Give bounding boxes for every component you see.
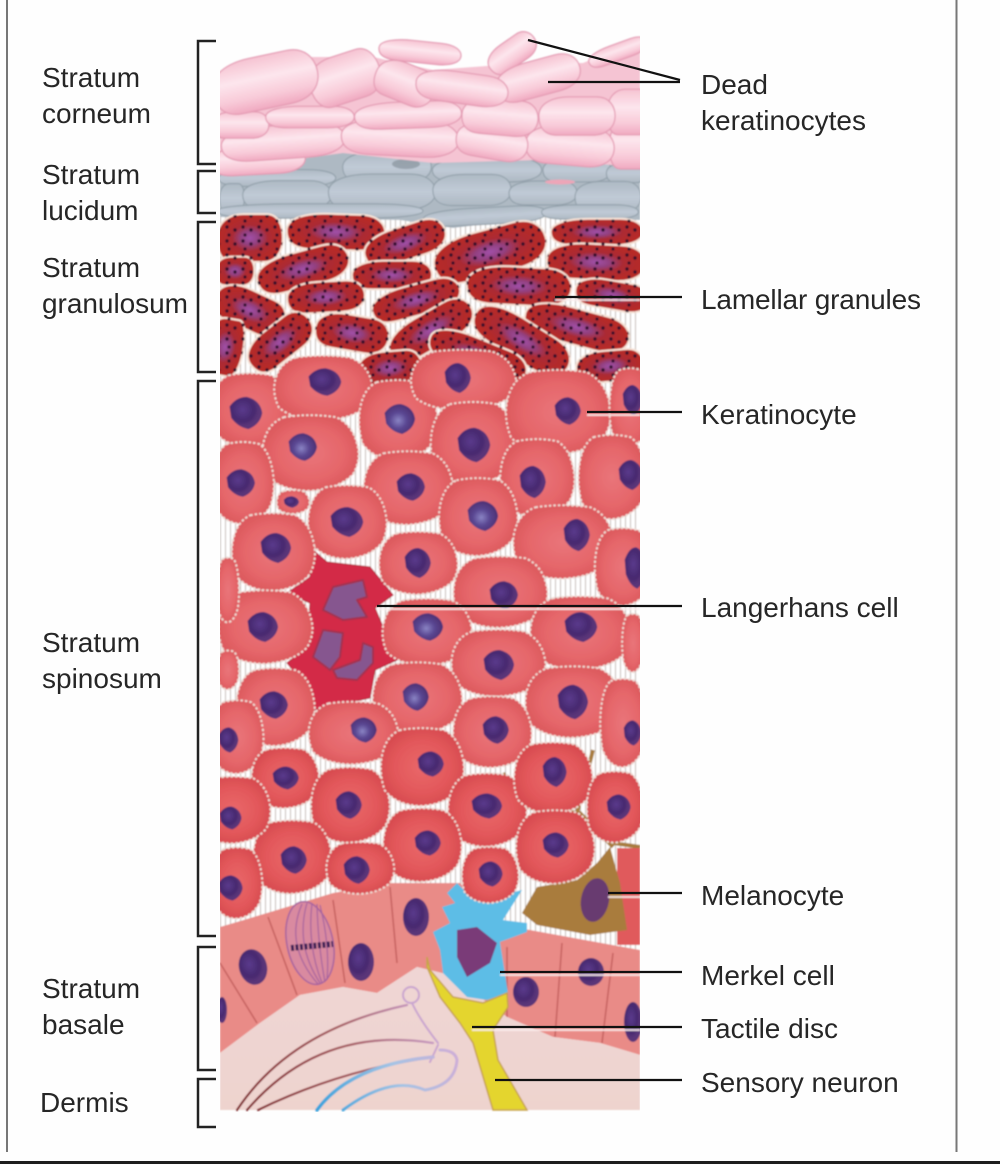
leader: Merkel cell xyxy=(500,971,682,973)
panel: stratum granulosum background xyxy=(220,216,636,370)
bottom frame line xyxy=(0,1161,1000,1164)
dermis nerve fibres and vessels xyxy=(237,987,457,1110)
bracket: stratum spinosum xyxy=(198,381,216,936)
leader: Langerhans cell xyxy=(377,605,682,607)
label: dead keratinocytes: Dead xyxy=(701,69,768,100)
Langerhans cell xyxy=(287,550,397,710)
lamellar granule dots xyxy=(220,215,640,390)
leader: tactile disc xyxy=(472,1026,682,1028)
leader: dead keratinocytes xyxy=(528,40,680,82)
pale ghost lines under the leader lines xyxy=(377,300,640,1030)
label: keratinocyte: Keratinocyte xyxy=(701,399,857,430)
label: stratum granulosum: Stratum xyxy=(42,252,140,283)
panel: stratum lucidum xyxy=(217,150,648,228)
label: stratum lucidum: lucidum xyxy=(42,195,138,226)
panel: stratum basale xyxy=(217,883,642,1055)
Merkel cell xyxy=(433,883,527,1000)
label: Merkel cell: Merkel cell xyxy=(701,960,835,991)
label: stratum basale: Stratum xyxy=(42,973,140,1004)
panel: dermis xyxy=(220,967,640,1110)
label: Langerhans cell: Langerhans cell xyxy=(701,592,899,623)
label: stratum corneum: corneum xyxy=(42,98,151,129)
tactile disc and sensory neuron xyxy=(427,957,527,1110)
leader: melanocyte xyxy=(608,892,682,894)
label: dermis: Dermis xyxy=(40,1087,129,1118)
label: tactile disc: Tactile disc xyxy=(701,1013,838,1044)
label: sensory neuron: Sensory neuron xyxy=(701,1067,899,1098)
panel: stratum corneum dead keratinocytes xyxy=(207,27,655,177)
right frame line xyxy=(956,0,958,1152)
label: dead keratinocytes: keratinocytes xyxy=(701,105,866,136)
bracket: stratum basale xyxy=(198,947,216,1070)
panel: stratum granulosum cells xyxy=(202,212,651,391)
label: stratum granulosum: granulosum xyxy=(42,288,188,319)
label: stratum spinosum: spinosum xyxy=(42,663,162,694)
label: stratum spinosum: Stratum xyxy=(42,627,140,658)
left frame line xyxy=(6,0,8,1152)
basal nuclei xyxy=(217,898,642,1042)
keratinocyte nuclei xyxy=(219,363,647,901)
panel: stratum spinosum background with cell junction striations xyxy=(220,370,640,960)
bracket: stratum lucidum xyxy=(198,171,216,213)
label: lamellar granules: Lamellar granules xyxy=(701,284,921,315)
leader: lamellar granules xyxy=(555,296,682,298)
melanocyte dendrites xyxy=(503,750,640,847)
keratinocyte cells of the stratum spinosum xyxy=(211,350,652,774)
mitotic cell spindle xyxy=(284,900,336,986)
leader: keratinocyte xyxy=(587,411,682,413)
bracket: stratum granulosum xyxy=(198,222,216,372)
label: melanocyte: Melanocyte xyxy=(701,880,844,911)
bracket: dermis xyxy=(198,1079,216,1127)
melanocyte xyxy=(522,847,640,945)
leader: sensory neuron xyxy=(495,1079,682,1081)
label: stratum basale: basale xyxy=(42,1009,125,1040)
label: stratum corneum: Stratum xyxy=(42,62,140,93)
label: stratum lucidum: Stratum xyxy=(42,159,140,190)
bracket: stratum corneum xyxy=(198,41,216,164)
skin cross-section illustration xyxy=(196,27,655,1110)
keratinocyte cells near the basal layer xyxy=(196,728,644,919)
basal cell divisions xyxy=(220,887,613,1043)
